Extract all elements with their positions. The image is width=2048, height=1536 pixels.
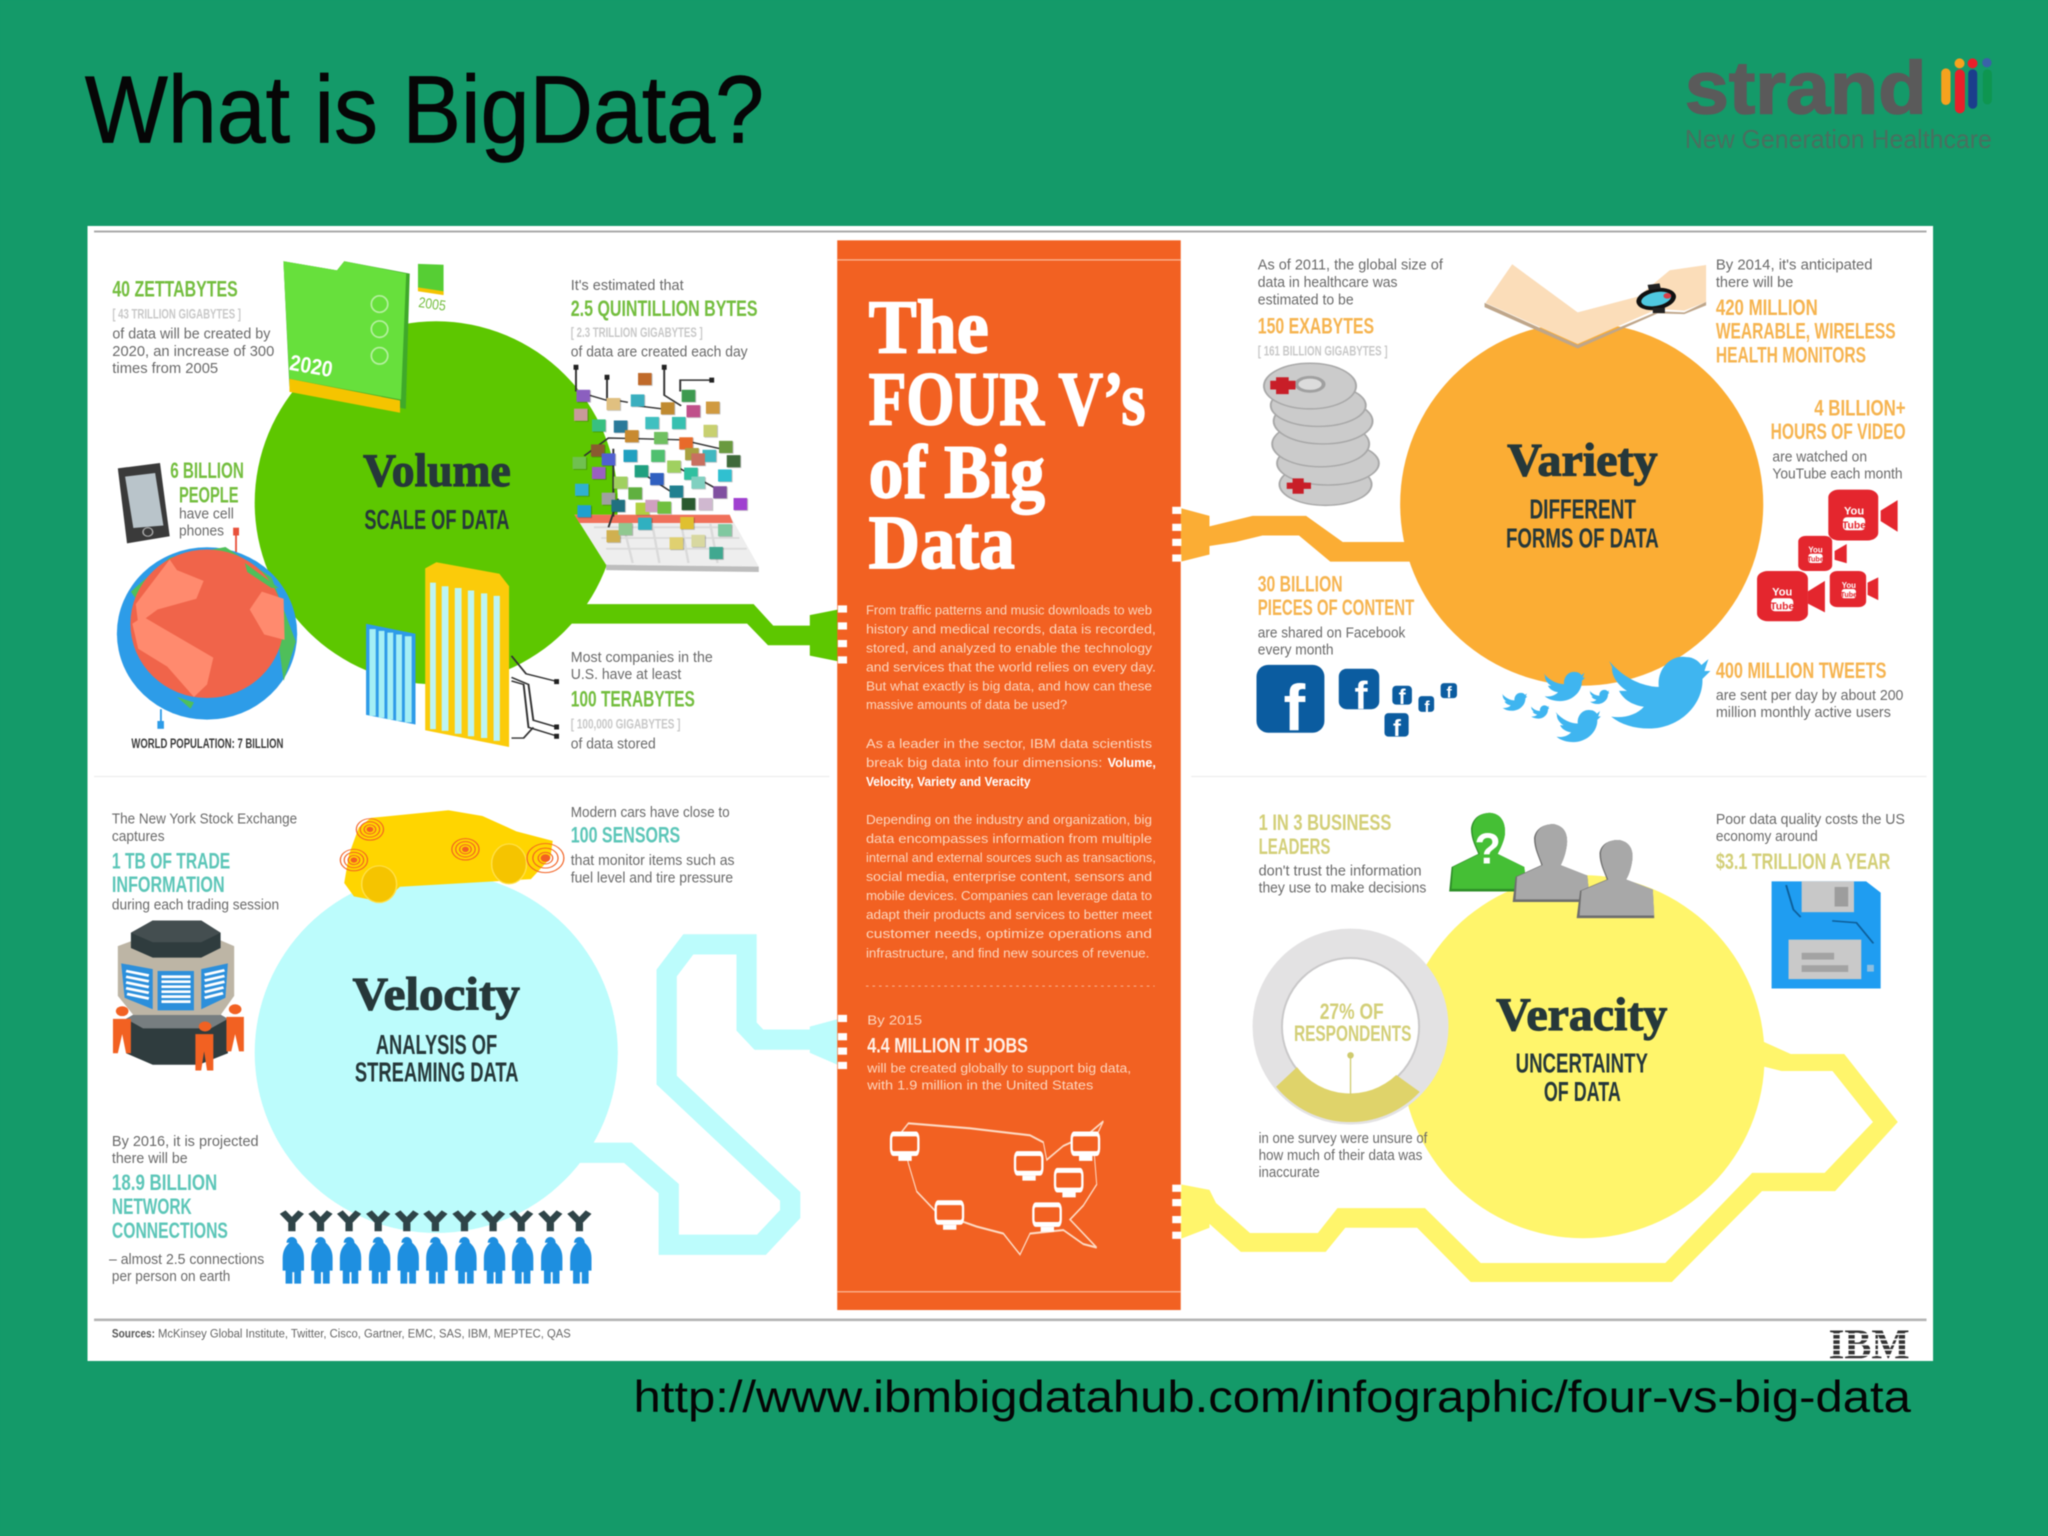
icon: office buildings	[366, 562, 559, 747]
stat: 100 terabytes	[571, 650, 713, 752]
stat: 100 terabytes: of data stored	[571, 736, 656, 752]
third paragraph: social media, enterprise content, sensors and	[866, 869, 1152, 884]
subheading: uncertainty of data: UNCERTAINTY	[1516, 1047, 1648, 1078]
icons: twitter birds	[1502, 657, 1710, 742]
panel: four Vs centre column	[837, 240, 1181, 1310]
icon: data cubes on keyboard	[573, 365, 759, 572]
veracity circle	[1401, 875, 1765, 1238]
intro paragraph: massive amounts of data be used?	[866, 697, 1067, 712]
stat: 6 billion people: 6 BILLION	[170, 458, 244, 483]
subheading: uncertainty of data: OF DATA	[1544, 1076, 1621, 1107]
stat text: survey	[1259, 1131, 1428, 1181]
stat: 2.5 quintillion bytes: of data are created each day	[571, 345, 748, 361]
stat: network connections: By 2016, it is projected	[112, 1134, 259, 1150]
heading: the four Vs of big data	[869, 286, 1145, 585]
volume circle	[255, 321, 618, 684]
stat: 30 billion pieces of content: PIECES OF CONTENT	[1258, 595, 1415, 620]
icon: globe	[117, 528, 297, 729]
icon: business leaders silhouettes: ?	[1475, 825, 1501, 873]
stat: 420 million wearables: 420 MILLION	[1716, 295, 1818, 320]
stat: 4.4 million IT jobs: 4.4 MILLION IT JOBS	[867, 1035, 1028, 1058]
stat: network connections: 18.9 BILLION	[112, 1170, 217, 1195]
heading: the four Vs of big data: FOUR V’s	[869, 357, 1145, 441]
subheading: analysis of streaming data: ANALYSIS OF	[376, 1029, 497, 1060]
third paragraph: data encompasses information from multiple	[866, 831, 1152, 846]
stat: 6 billion people: have cell	[179, 507, 234, 523]
stat: 400 million tweets: 400 MILLION TWEETS	[1716, 658, 1886, 683]
stat: 100 terabytes: 100 TERABYTES	[571, 687, 695, 712]
third paragraph: internal and external sources such as transactions,	[866, 850, 1156, 865]
stat: 2.5 quintillion bytes: [ 2.3 TRILLION GIGABYTES ]	[571, 325, 703, 340]
stat: 40 zettabytes: [ 43 TRILLION GIGABYTES ]	[112, 306, 241, 321]
icon: arm with wearable monitor	[1485, 264, 1706, 349]
stat: 100 sensors: Modern cars have close to	[571, 805, 730, 821]
stat: 150 exabytes: data in healthcare was	[1258, 275, 1398, 291]
stat: 100 terabytes: [ 100,000 GIGABYTES ]	[571, 716, 680, 731]
heading: volume: Volume	[363, 445, 511, 497]
stat: 4 billion hours of video: are watched on	[1772, 449, 1867, 465]
stat: 420 million wearables: By 2014, it's anticipated	[1716, 258, 1873, 274]
stat: 420 million wearables: WEARABLE, WIRELESS	[1716, 319, 1896, 344]
stat text: survey: how much of their data was	[1259, 1148, 1422, 1164]
icons: facebook logos: f	[1283, 671, 1305, 744]
icons: youtube cameras: Tube	[1842, 520, 1866, 531]
icons: youtube cameras: You	[1772, 587, 1792, 599]
stat: 6 billion people: PEOPLE	[179, 482, 238, 507]
logo: IBM: IBM	[1829, 1322, 1910, 1368]
third paragraph: customer needs, optimize operations and	[866, 926, 1152, 941]
logo: strand	[1685, 47, 1992, 154]
stat: 30 billion pieces of content: are shared on Facebook	[1258, 625, 1406, 641]
heading: the four Vs of big data: The	[869, 286, 989, 370]
intro paragraph: history and medical records, data is recorded,	[866, 622, 1156, 637]
stat: 40 zettabytes: of data will be created by	[112, 326, 271, 342]
stat: 30 billion pieces of content: every month	[1258, 642, 1334, 658]
stat text: survey: in one survey were unsure of	[1259, 1131, 1428, 1147]
connector plugs: white stripes	[838, 507, 1181, 1239]
second paragraph: Volume,	[1108, 755, 1156, 770]
icons: facebook logos	[1256, 665, 1457, 744]
intro paragraph: From traffic patterns and music downloads to web	[866, 603, 1152, 618]
intro paragraph: and services that the world relies on every day.	[866, 659, 1156, 674]
stat: 100 sensors: fuel level and tire pressure	[571, 870, 733, 886]
stat: 420 million wearables	[1716, 258, 1896, 368]
stat: 30 billion pieces of content: 30 BILLION	[1258, 571, 1343, 596]
heading: veracity: Veracity	[1496, 989, 1668, 1041]
chart: 27% of respondents donut: RESPONDENTS	[1294, 1021, 1411, 1046]
infographic panel	[88, 226, 1933, 1368]
icon: memory cards: 2005	[417, 295, 447, 315]
logo: strand: strand	[1685, 47, 1927, 130]
stat: 6 billion people: phones	[179, 524, 224, 540]
heading: the four Vs of big data: Data	[869, 501, 1015, 585]
stat: 100 sensors: that monitor items such as	[571, 853, 735, 869]
variety circle	[1400, 323, 1763, 686]
stat: 2.5 quintillion bytes	[571, 278, 758, 361]
stat: network connections: – almost 2.5 connections	[109, 1252, 264, 1268]
stat: 420 million wearables: HEALTH MONITORS	[1716, 343, 1866, 368]
chart: 27% of respondents donut: 27% OF	[1320, 999, 1384, 1024]
icon: stack of disks	[1264, 363, 1379, 505]
stat text: survey: inaccurate	[1259, 1165, 1320, 1181]
stat: 150 exabytes: estimated to be	[1258, 292, 1354, 308]
icons: youtube cameras	[1757, 490, 1898, 621]
caption: world population: WORLD POPULATION: 7 BILLION	[131, 736, 283, 751]
stat: 1 in 3 business leaders: LEADERS	[1259, 834, 1330, 859]
icons: facebook logos: f	[1447, 684, 1453, 701]
stat: 30 billion pieces of content	[1258, 571, 1415, 658]
third paragraph: infrastructure, and find new sources of revenue.	[866, 945, 1149, 960]
sources: McKinsey Global Institute, Twitter, Cisco, Gartner, EMC, SAS, IBM, MEPTEC, QAS	[158, 1327, 571, 1340]
panel: variety	[1256, 258, 1906, 744]
stat: network connections: NETWORK	[112, 1194, 192, 1219]
icon: memory cards	[283, 261, 447, 413]
panel: velocity	[109, 805, 735, 1285]
stat: 40 zettabytes: 2020, an increase of 300	[112, 344, 274, 360]
icons: youtube cameras: Tube	[1807, 556, 1824, 564]
icons: youtube cameras: Tube	[1770, 601, 1794, 612]
stat: stock exchange: INFORMATION	[112, 872, 225, 897]
stat: 100 sensors: 100 SENSORS	[571, 822, 680, 847]
stat: 400 million tweets	[1716, 658, 1903, 721]
stat: 420 million wearables: there will be	[1716, 275, 1793, 291]
second paragraph: As a leader in the sector, IBM data scientists	[866, 736, 1153, 751]
subheading: analysis of streaming data: STREAMING DATA	[355, 1056, 519, 1087]
stat: 1 in 3 business leaders	[1259, 810, 1426, 897]
velocity circle	[255, 872, 618, 1233]
stat: 4.4 million IT jobs: By 2015	[867, 1013, 922, 1028]
stat: 40 zettabytes: times from 2005	[112, 361, 218, 377]
stat: 4.4 million IT jobs: with 1.9 million in the United States	[866, 1077, 1094, 1092]
panel: veracity	[1259, 810, 1905, 1238]
third paragraph	[866, 812, 1156, 960]
subheading: scale of data: SCALE OF DATA	[364, 504, 510, 535]
icon: memory cards: 2020	[288, 350, 335, 382]
icons: facebook logos: f	[1399, 686, 1406, 709]
second paragraph: Velocity, Variety and Veracity	[866, 774, 1031, 789]
stat: network connections: CONNECTIONS	[112, 1218, 228, 1243]
icon: US map with monitors	[891, 1121, 1103, 1255]
connector: variety	[1176, 507, 1424, 563]
source url: http://www.ibmbigdatahub.com/infographic/four-vs-big-data	[633, 1373, 1911, 1422]
second paragraph	[866, 736, 1156, 789]
stat: 4 billion hours of video: HOURS OF VIDEO	[1771, 419, 1906, 444]
intro paragraph: stored, and analyzed to enable the technology	[866, 641, 1153, 656]
stat: 400 million tweets: million monthly active users	[1716, 705, 1891, 721]
logo: strand: New Generation Healthcare	[1685, 124, 1992, 154]
stat: stock exchange	[112, 812, 297, 914]
connector: veracity	[1176, 1036, 1898, 1282]
connector: velocity	[555, 944, 849, 1245]
stat: network connections	[109, 1134, 264, 1285]
stat: 100 terabytes: Most companies in the	[571, 650, 713, 666]
stat: 150 exabytes: As of 2011, the global size of	[1258, 258, 1444, 274]
icons: youtube cameras: You	[1842, 581, 1856, 590]
icon: stock exchange building	[113, 920, 244, 1071]
stat: 4 billion hours of video: YouTube each month	[1772, 466, 1902, 482]
heading: variety: Variety	[1507, 434, 1658, 486]
intro paragraph	[866, 603, 1156, 712]
stat: stock exchange: during each trading session	[112, 898, 279, 914]
stat: 4.4 million IT jobs	[866, 1013, 1131, 1092]
second paragraph: break big data into four dimensions:	[866, 755, 1102, 770]
stat: 2.5 quintillion bytes: It's estimated that	[571, 278, 684, 294]
stat: 4 billion hours of video	[1771, 395, 1906, 482]
stat: stock exchange: 1 TB OF TRADE	[112, 849, 230, 874]
stat: 4 billion hours of video: 4 BILLION+	[1814, 395, 1906, 420]
subheading: different forms of data: DIFFERENT	[1529, 494, 1636, 525]
subheading: uncertainty of data	[1516, 1047, 1648, 1107]
panel: volume	[112, 261, 759, 752]
intro paragraph: But what exactly is big data, and how can these	[866, 678, 1152, 693]
third paragraph: mobile devices. Companies can leverage data to	[866, 888, 1152, 903]
icon: broken floppy disk	[1772, 881, 1881, 989]
stat: 3.1 trillion a year: $3.1 TRILLION A YEAR	[1716, 849, 1890, 874]
icons: facebook logos: f	[1424, 699, 1430, 716]
icons: youtube cameras: You	[1844, 506, 1864, 518]
stat: 1 in 3 business leaders: they use to make decisions	[1259, 881, 1426, 897]
icons: youtube cameras: Tube	[1841, 591, 1857, 599]
stat: 400 million tweets: are sent per day by about 200	[1716, 688, 1903, 704]
stat: 3.1 trillion a year: economy around	[1716, 829, 1818, 845]
icons: youtube cameras: You	[1808, 545, 1823, 554]
heading: velocity: Velocity	[353, 969, 520, 1021]
stat: stock exchange: The New York Stock Exchange	[112, 812, 297, 828]
stat: 40 zettabytes: 40 ZETTABYTES	[112, 276, 238, 301]
subheading: different forms of data	[1506, 494, 1659, 553]
icon: yellow car with sensors	[340, 810, 564, 903]
stat: 40 zettabytes	[112, 276, 274, 377]
heading: the four Vs of big data: of Big	[869, 431, 1045, 515]
stat: network connections: per person on earth	[112, 1269, 230, 1285]
stat: 6 billion people	[170, 458, 244, 540]
title: What is BigData?	[85, 57, 764, 163]
stat: 1 in 3 business leaders: don't trust the information	[1259, 864, 1422, 880]
icons: facebook logos: f	[1393, 715, 1401, 741]
stat: 1 in 3 business leaders: 1 IN 3 BUSINESS	[1259, 810, 1391, 835]
sources: Sources:	[112, 1327, 155, 1340]
subheading: different forms of data: FORMS OF DATA	[1506, 522, 1659, 553]
third paragraph: adapt their products and services to better meet	[866, 907, 1152, 922]
stat: 150 exabytes: [ 161 BILLION GIGABYTES ]	[1258, 344, 1388, 359]
third paragraph: Depending on the industry and organization, big	[866, 812, 1152, 827]
stat: 100 terabytes: U.S. have at least	[571, 667, 681, 683]
stat: 150 exabytes	[1258, 258, 1444, 359]
connector: volume	[555, 604, 849, 664]
stat: 100 sensors	[571, 805, 735, 886]
subheading: analysis of streaming data	[355, 1029, 519, 1087]
stat: network connections: there will be	[112, 1151, 188, 1167]
icon: phone	[118, 463, 170, 543]
chart: 27% of respondents donut	[1267, 943, 1434, 1122]
stat: 4.4 million IT jobs: will be created globally to support big data,	[866, 1060, 1131, 1075]
stat: 150 exabytes: 150 EXABYTES	[1258, 313, 1374, 338]
stat: 3.1 trillion a year: Poor data quality costs the US	[1716, 812, 1905, 828]
stat: stock exchange: captures	[112, 829, 165, 845]
icon: business leaders silhouettes	[1449, 813, 1654, 918]
icons: facebook logos: f	[1354, 675, 1368, 718]
icon: people with network connections	[283, 1212, 591, 1284]
stat: 2.5 quintillion bytes: 2.5 QUINTILLION BYTES	[571, 296, 758, 321]
stat: 3.1 trillion a year	[1716, 812, 1905, 874]
